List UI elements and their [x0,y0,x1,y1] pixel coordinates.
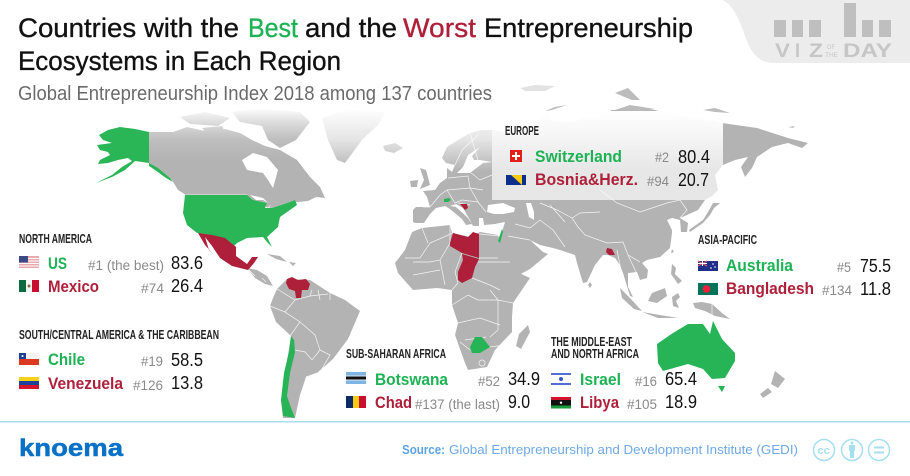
panel: South/Central America: #126 [133,378,163,393]
row: Bosnia: Bosnia&Herz. [535,170,638,189]
panel: Middle-East and North Africa [551,334,697,412]
heading: Europe: EUROPE [505,123,539,138]
panel: Sub-Saharan Africa: 9.0 [508,392,530,412]
flag: US [19,256,39,268]
panel: Sub-Saharan Africa: #137 (the last) [415,397,500,412]
panel: South/Central America: #19 [141,354,163,369]
panel: South/Central America: 13.8 [171,373,203,393]
Russian arctic islands [545,88,795,128]
panel: Asia-Pacific: #134 [822,283,852,298]
panel: Middle-East and North Africa: #16 [635,374,657,389]
Central America and Caribbean [247,254,296,286]
South America [270,279,360,418]
flag: Mexico [19,280,39,292]
country: Libya [450,232,479,258]
country: Switzerland [444,198,451,202]
Asia-Pacific islands [588,203,785,398]
Canada [149,127,325,208]
UK and Ireland [410,168,430,189]
logo: viz of the day: DAY [843,40,892,62]
panel: Middle-East and North Africa: 18.9 [665,392,697,412]
panel: Europe highlight overlay [492,111,723,200]
heading: North America: NORTH AMERICA [19,231,92,246]
title: and the [305,13,397,43]
icons: creative commons [814,440,890,460]
row: Libya: Libya [580,393,619,412]
logo: viz of the day: THE [825,53,838,59]
panel: Asia-Pacific [698,232,891,299]
country: Venezuela [286,277,310,298]
Iceland [383,143,403,153]
country: Botswana [470,337,490,353]
panel: North America [19,231,203,296]
Greenland [322,110,385,163]
source: Source: [402,442,445,457]
row: Botswana: Botswana [375,370,448,389]
country: USA and Alaska [96,127,297,247]
land: gray countries [149,108,808,418]
title [18,13,693,76]
source: Global Entrepreneurship and Development Institute (GEDI) [449,442,798,457]
panel: Sub-Saharan Africa: 34.9 [508,369,540,389]
flag: Switzerland [510,150,522,162]
Svalbard [520,85,555,91]
title: Best [248,13,298,43]
panel: Asia-Pacific: 75.5 [860,256,891,276]
Madagascar [516,325,530,349]
panel: Europe: 80.4 [678,147,710,167]
logo: knoema: knoema [19,435,124,462]
panel: Europe: #94 [647,174,669,189]
panel: North America: #74 [141,281,164,296]
logo: viz of the day: V [775,40,790,62]
row: Israel: Israel [580,370,621,389]
subtitle: Global Entrepreneurship Index 2018 among 137 countries [18,83,492,105]
panel: South/Central America: 58.5 [171,350,203,370]
row: Chad: Chad [375,393,412,412]
Africa [395,225,530,370]
title: Countries with the [18,13,239,43]
title: Worst [403,13,477,43]
country: Mexico [198,233,258,270]
heading: Middle-East and North Africa [551,334,639,361]
country: Chad [458,254,479,283]
icons: creative commons: cc [818,445,830,457]
flag: Botswana [346,372,366,384]
logo: viz of the day: I [795,40,800,62]
country: Bosnia [460,204,468,210]
row: Chile: Chile [48,350,85,369]
flag: Bangladesh [698,283,718,295]
panel: Europe: 20.7 [678,170,709,190]
flag: Australia [698,261,718,271]
country: Australia [657,321,735,392]
row: Mexico: Mexico [48,277,99,296]
country borders [186,133,712,377]
row: Bangladesh: Bangladesh [726,279,814,298]
flag: Israel [551,373,571,385]
panel: North America: #1 (the best) [88,258,164,273]
row: Venezuela: Venezuela [48,374,123,393]
seas cut out of the land [242,147,534,220]
row: Australia: Australia [726,256,794,275]
Arctic islands [180,108,310,148]
panel: Sub-Saharan Africa [346,346,540,412]
panel: Middle-East and North Africa: #105 [627,397,657,412]
heading: Sub-Saharan Africa: SUB-SAHARAN AFRICA [346,346,446,361]
panel: South/Central America [19,327,219,393]
title: Entrepreneurship [484,13,693,43]
heading: Middle-East and North Africa: THE MIDDLE-EAST [551,334,632,349]
row: US: US [48,254,67,273]
Eurasia [413,109,808,297]
logo: viz of the day: OF [827,45,835,51]
panel: Europe [505,123,710,190]
panel: North America: 26.4 [171,276,203,296]
flag: Libya [551,397,571,408]
flag: Bosnia [506,175,526,185]
country: Chile [281,336,295,418]
flag: Chad [346,396,366,408]
panel: Asia-Pacific: #5 [837,260,851,275]
logo: viz of the day: Z [809,40,823,62]
panel: Middle-East and North Africa: 65.4 [665,369,697,389]
world map [85,85,808,418]
row: Switzerland: Switzerland [535,147,622,166]
heading: Middle-East and North Africa: AND NORTH AFRICA [551,346,639,361]
panel: Asia-Pacific: 11.8 [860,279,891,299]
fade of northern land [85,106,320,160]
flag: Chile [19,353,39,365]
panel: North America: 83.6 [171,253,203,273]
heading: South/Central America: SOUTH/CENTRAL AMERICA & THE CARIBBEAN [19,327,219,342]
title: Ecosystems in Each Region [18,46,341,76]
logo: viz of the day [722,0,910,63]
panel: Sub-Saharan Africa: #52 [478,374,500,389]
heading: Asia-Pacific: ASIA-PACIFIC [698,232,757,247]
flag: Venezuela [19,377,39,389]
country: Bangladesh [606,248,615,255]
country: Israel [498,229,503,243]
panel: Europe: #2 [655,150,669,165]
footer rule [0,421,910,422]
